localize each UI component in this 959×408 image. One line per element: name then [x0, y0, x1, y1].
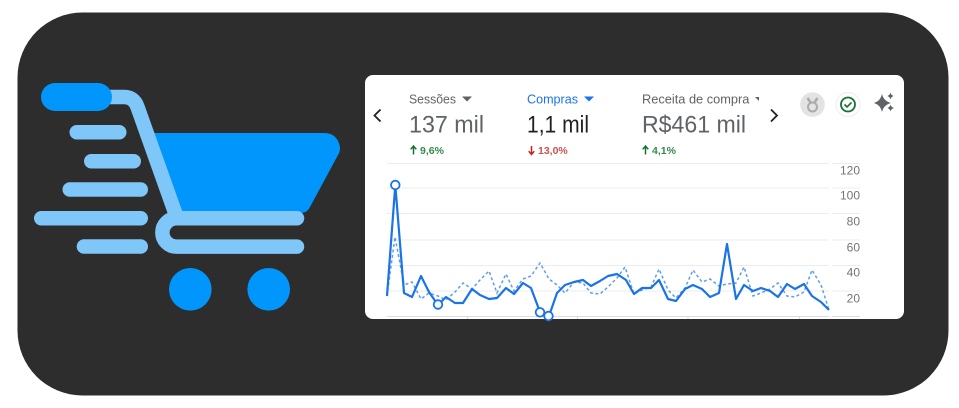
metric: revenue: Receita de compra — [642, 92, 750, 106]
metric: sessions: 137 mil — [409, 112, 484, 138]
comparison series dashed — [387, 237, 829, 310]
metric: revenue: R$461 mil — [642, 112, 746, 138]
metric: sessions: Sessões — [409, 92, 456, 106]
icon: previous arrow — [374, 110, 380, 122]
metric: purchases — [527, 92, 594, 157]
metric: purchases: 13,0% — [538, 145, 568, 157]
y axis labels: 40 — [847, 266, 860, 280]
line chart — [387, 164, 860, 320]
speed lines — [34, 125, 148, 254]
cart wheels — [169, 268, 290, 311]
analytics panel — [365, 75, 904, 320]
metric: sessions: 9,6% — [420, 145, 445, 157]
grid lines — [387, 164, 860, 319]
cart base — [162, 218, 297, 247]
panel background — [365, 75, 904, 319]
metric: purchases: 1,1 mil — [527, 112, 589, 138]
icon: shopping cart — [34, 83, 340, 311]
anomaly markers — [391, 181, 553, 320]
metric: revenue: 4,1% — [652, 145, 677, 157]
metric: sessions — [409, 92, 484, 157]
metric: revenue — [642, 92, 759, 157]
main series solid — [387, 185, 829, 316]
cart basket — [152, 133, 340, 213]
icon: verified check — [836, 92, 860, 116]
y axis labels: 20 — [847, 292, 860, 306]
y axis labels — [840, 164, 860, 306]
icon: sparkle — [874, 92, 894, 112]
y axis labels: 80 — [847, 214, 860, 228]
metric: purchases: Compras — [527, 92, 578, 106]
y axis labels: 100 — [840, 188, 860, 202]
cart handle — [41, 83, 112, 111]
y axis labels: 120 — [840, 164, 860, 178]
y axis labels: 60 — [847, 240, 860, 254]
icon: medal badge — [800, 92, 825, 117]
cart frame — [105, 97, 177, 218]
icon: next arrow — [771, 110, 777, 122]
